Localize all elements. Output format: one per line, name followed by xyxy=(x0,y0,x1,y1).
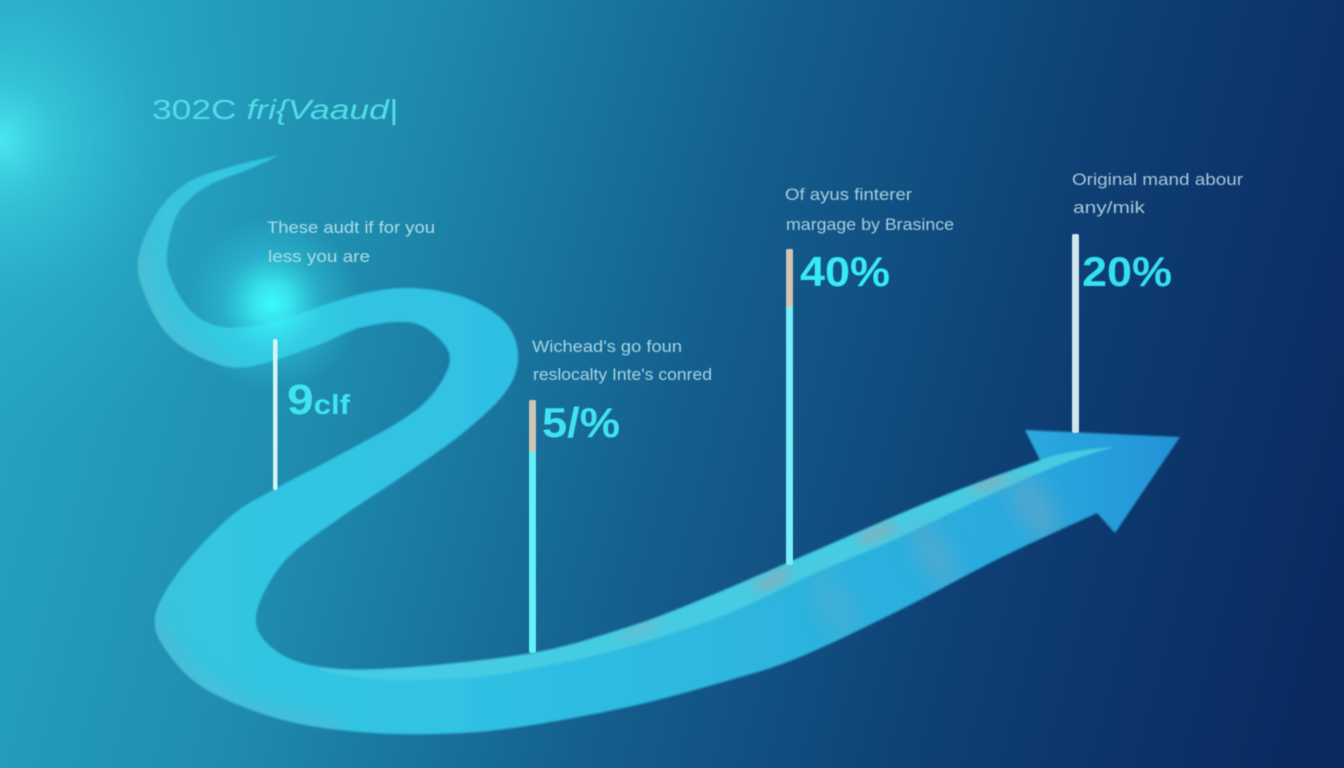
ribbon muted edge at lower left xyxy=(136,240,340,735)
milestone 4 xyxy=(1072,171,1244,433)
value 3: 40% xyxy=(800,248,890,295)
caption 3: Of ayus finterer xyxy=(785,186,913,204)
caption 1: less you are xyxy=(268,248,370,266)
stem 1 xyxy=(273,339,278,490)
title: 302C fri{Vaaud| xyxy=(152,94,398,125)
caption 1: These audt if for you xyxy=(267,219,435,237)
ribbon body xyxy=(120,140,1200,750)
ribbon highlight band xyxy=(318,447,1115,680)
caption 4: any/mik xyxy=(1073,199,1146,217)
value 1: 9clf xyxy=(287,376,351,424)
value 2: 5/% xyxy=(542,399,620,446)
caption 2: reslocalty Inte's conred xyxy=(533,366,712,384)
stem 3 xyxy=(786,249,793,565)
value 4: 20% xyxy=(1082,248,1172,295)
stem 2 xyxy=(529,400,536,653)
caption 2: Wichead's go foun xyxy=(532,338,682,356)
central glow xyxy=(182,213,362,393)
caption 2 xyxy=(532,338,712,384)
milestone 2 xyxy=(529,338,712,653)
flowing ribbon arrow xyxy=(120,140,1200,750)
caption 4: Original mand abour xyxy=(1072,171,1244,189)
caption 3 xyxy=(785,186,954,234)
ribbon muted patches xyxy=(615,471,1013,644)
caption 1 xyxy=(267,219,435,266)
caption 3: margage by Brasince xyxy=(786,216,954,234)
stem 4 xyxy=(1072,234,1079,433)
caption 4 xyxy=(1072,171,1244,217)
milestone 1 xyxy=(267,219,435,490)
milestone 3 xyxy=(785,186,954,565)
